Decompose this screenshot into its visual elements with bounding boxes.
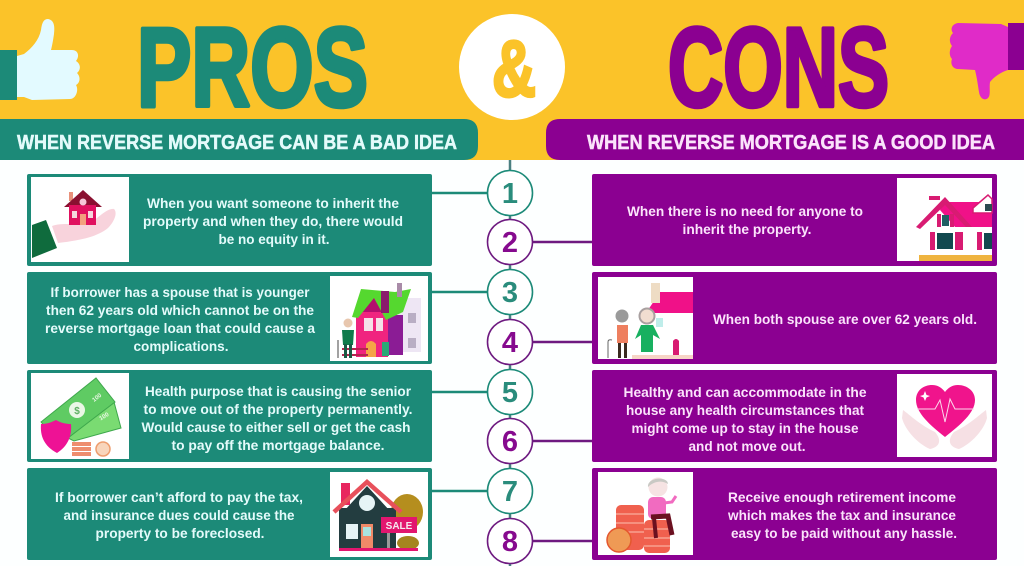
text: con 1: inherit the property.	[682, 221, 812, 237]
text: pro 2: If borrower has a spouse that is younger	[50, 284, 310, 300]
number 1: 1	[502, 178, 518, 210]
ampersand badge: &	[492, 24, 536, 113]
icon: heart in hands	[902, 385, 987, 449]
ampersand badge	[459, 14, 565, 120]
number 3	[488, 270, 532, 314]
icon: senior sitting on coins	[607, 478, 676, 553]
number 2: 2	[502, 227, 518, 259]
icon: house for sale	[334, 482, 423, 551]
text: con 3: might come up to stay in the house	[632, 420, 859, 436]
icon: money, shield and coins: 100	[92, 392, 104, 404]
panel: pro 2	[27, 272, 432, 364]
text: pro 4: If borrower can’t afford to pay the tax,	[55, 489, 303, 505]
icon: pink roof house	[916, 195, 992, 261]
icon: thumbs down	[950, 23, 1024, 99]
number 4	[488, 320, 532, 364]
title: PROS: PROS	[137, 5, 368, 130]
icon: house for sale: SALE	[386, 521, 413, 532]
number 6: 6	[502, 426, 518, 458]
text: con 3: and not move out.	[688, 438, 806, 454]
title: CONS: CONS	[668, 5, 889, 130]
icon: money, shield and coins	[41, 378, 121, 456]
number 5	[488, 370, 532, 414]
text: pro 1	[143, 195, 403, 247]
number 8: 8	[502, 526, 518, 558]
text: pro 2: then 62 years old which cannot be on the	[46, 302, 314, 318]
icon: house in hand	[32, 190, 116, 258]
icon: house with green roof and man	[338, 283, 421, 358]
number 1	[488, 170, 532, 216]
text: pro 2: complications.	[134, 338, 228, 354]
icon: money, shield and coins: 100	[99, 412, 111, 422]
text: con 4: Receive enough retirement income	[728, 489, 956, 505]
text: con 3	[624, 384, 867, 454]
panel: con 3	[592, 370, 997, 462]
panel: con 2	[592, 272, 997, 364]
number 8	[488, 518, 532, 564]
timeline with numbered circles	[432, 160, 593, 566]
text: con 4: which makes the tax and insurance	[727, 507, 956, 523]
text: pro 4: and insurance dues could cause the	[64, 507, 295, 523]
text: con 4: easy to be paid without any hassle.	[731, 525, 957, 541]
text: con 1: When there is no need for anyone to	[627, 203, 863, 219]
icon: senior couple and house	[608, 283, 693, 359]
panel: pro 3	[27, 370, 432, 462]
heading bar: cons: WHEN REVERSE MORTGAGE IS A GOOD IDEA	[587, 132, 995, 154]
text: pro 3	[142, 383, 412, 453]
panel: pro 1	[27, 174, 432, 266]
number 5: 5	[502, 377, 518, 409]
text: con 3: Healthy and can accommodate in the	[624, 384, 867, 400]
text: pro 4	[55, 489, 303, 541]
icon: thumbs up	[0, 19, 80, 100]
text: pro 1: When you want someone to inherit the	[147, 195, 399, 211]
text: pro 3: to move out of the property permanently.	[144, 401, 412, 417]
text: con 1	[627, 203, 863, 237]
heading bar: pros	[0, 119, 478, 160]
text: pro 3: to pay off the mortgage balance.	[172, 437, 384, 453]
text: pro 1: be no equity in it.	[218, 231, 330, 247]
text: pro 4: property to be foreclosed.	[96, 525, 264, 541]
text: pro 2	[45, 284, 315, 354]
panel: con 4	[592, 468, 997, 560]
panel: pro 4	[27, 468, 432, 560]
header band	[0, 0, 1024, 160]
number 3: 3	[502, 277, 518, 309]
text: con 2: When both spouse are over 62 years old.	[713, 311, 977, 327]
text: pro 2: reverse mortgage loan that could cause a	[45, 320, 315, 336]
number 2	[488, 220, 532, 264]
icon: money, shield and coins: $	[74, 406, 80, 417]
number 4: 4	[502, 327, 518, 359]
text: pro 3: Health purpose that is causing the senior	[145, 383, 412, 399]
text: con 3: house any health circumstances that	[626, 402, 864, 418]
text: pro 3: Would cause to either sell or get the cash	[142, 419, 410, 435]
text: con 4	[727, 489, 957, 541]
number 7: 7	[502, 476, 518, 508]
number 6	[488, 418, 532, 464]
heading bar: pros: WHEN REVERSE MORTGAGE CAN BE A BAD IDEA	[17, 132, 457, 154]
heading bar: cons	[546, 119, 1024, 160]
number 7	[488, 468, 532, 514]
text: pro 1: property and when they do, there would	[143, 213, 403, 229]
panel: con 1	[592, 174, 997, 266]
